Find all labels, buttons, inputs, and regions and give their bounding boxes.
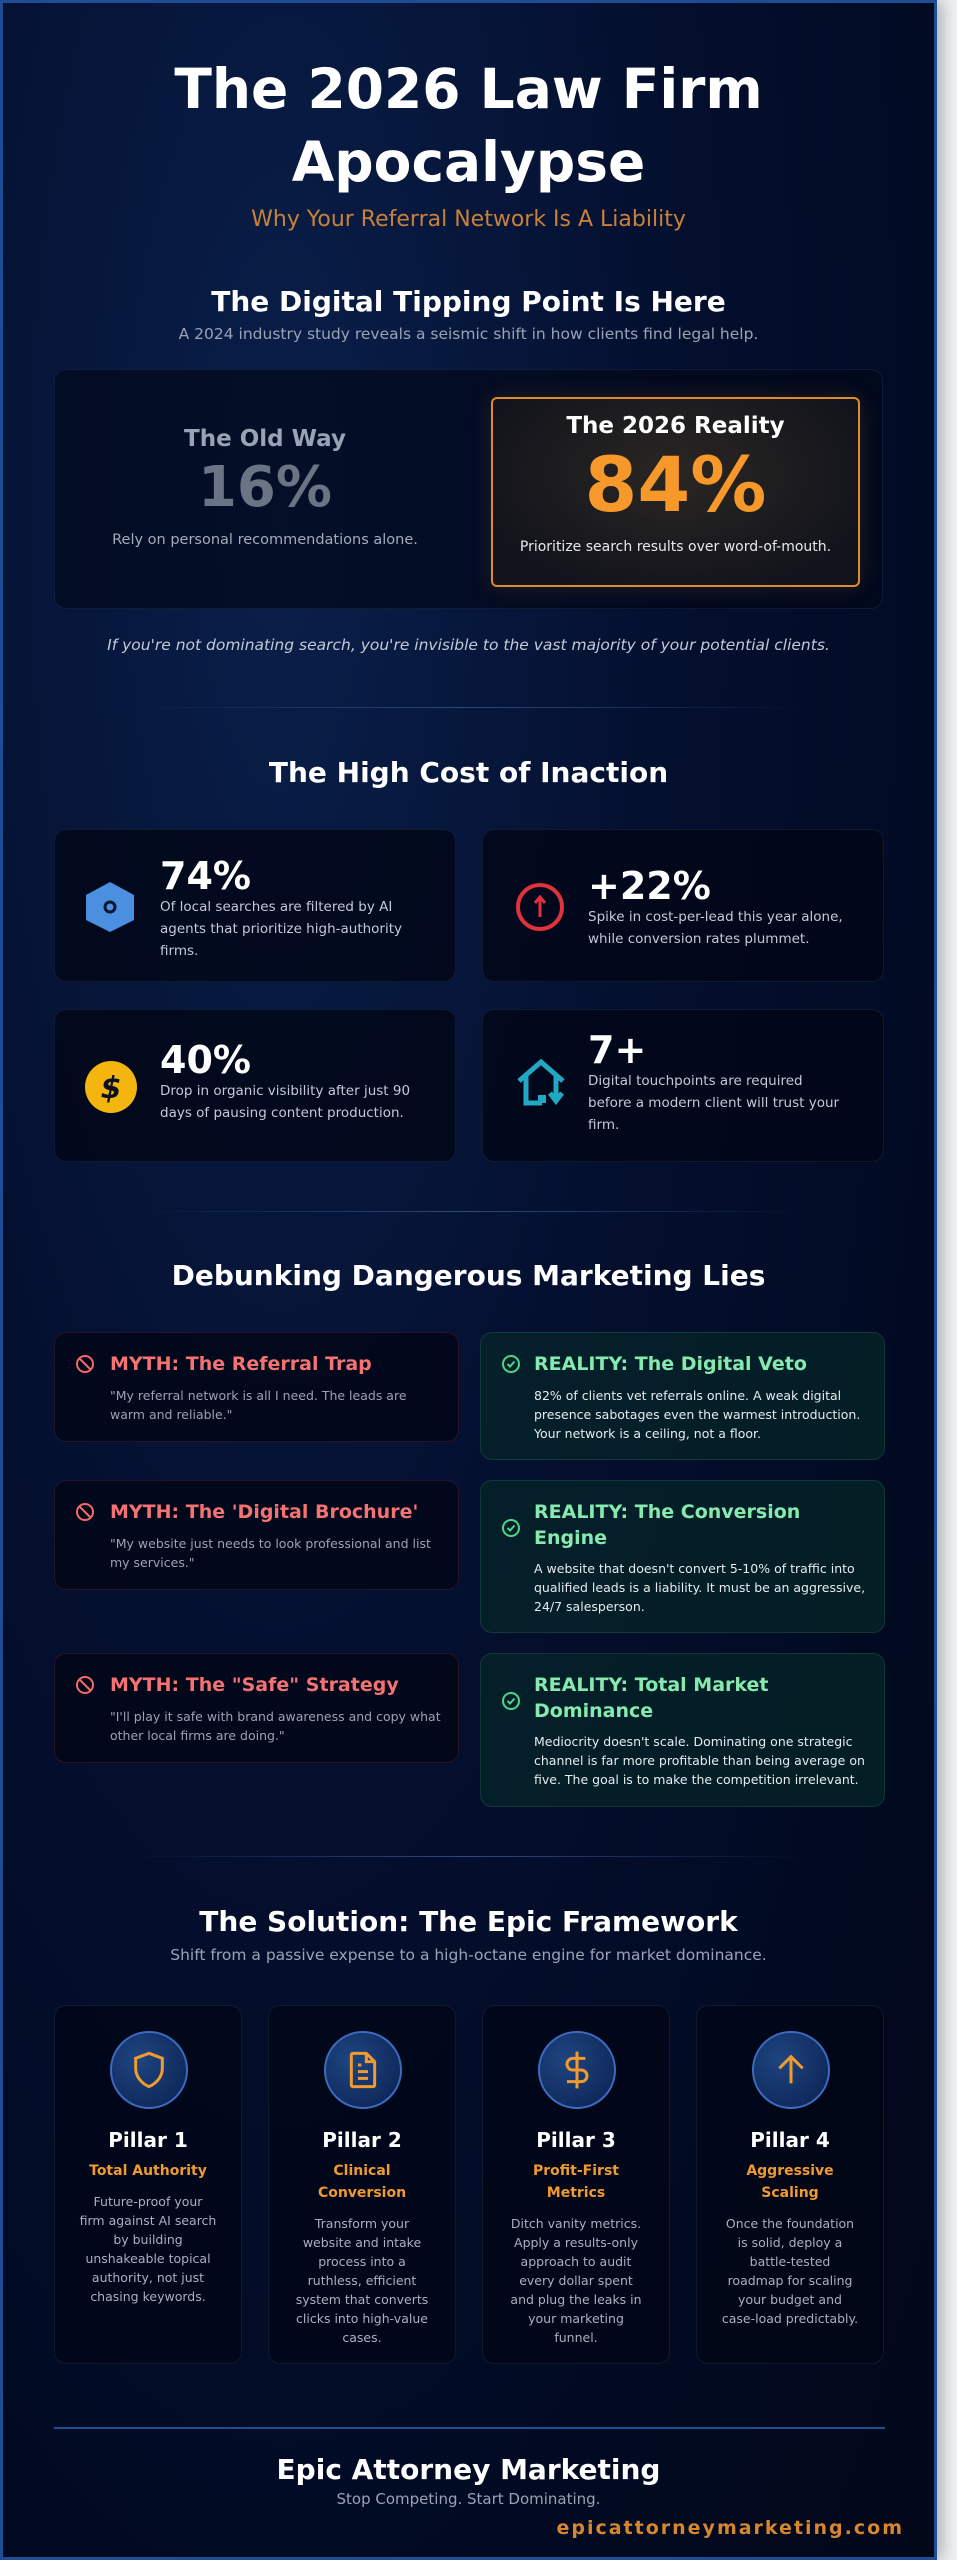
stat card 7+: 7+ [588, 1028, 646, 1072]
stat card +22% [482, 829, 884, 982]
icon: dollar [538, 2031, 616, 2109]
myth 1: "My referral network is all I need. The leads are warm and reliable." [110, 1388, 407, 1422]
icon: house arrow [517, 1059, 565, 1106]
pillar 2: Clinical Conversion [318, 2163, 406, 2201]
pillar 2: Pillar 2 [322, 2128, 402, 2152]
icon: check [502, 1692, 520, 1710]
stat card 40% [54, 1009, 456, 1162]
myth 3 [54, 1653, 459, 1763]
stat card 74% [54, 829, 456, 982]
heading: cost of inaction: The High Cost of Inaction [269, 756, 668, 789]
reality 3 [480, 1653, 885, 1807]
icon: check [502, 1355, 520, 1373]
myth 3: "I'll play it safe with brand awareness and copy what other local firms are doing." [110, 1709, 441, 1743]
stat card 7+ [482, 1009, 884, 1162]
myth 2: MYTH: The 'Digital Brochure' [110, 1501, 418, 1523]
old way [112, 426, 418, 548]
pillar 3: Pillar 3 [536, 2128, 616, 2152]
panel: comparison [54, 369, 883, 609]
footer brand: Epic Attorney Marketing [277, 2453, 660, 2486]
footer tagline: Stop Competing. Start Dominating. [337, 2490, 600, 2508]
icon: check [502, 1519, 520, 1537]
icon: ban [76, 1503, 94, 1521]
2026 reality card: 84% [585, 440, 766, 529]
icon: yellow coin: $ [101, 1071, 121, 1106]
text: study: A 2024 industry study reveals a seismic shift in how clients find legal help. [179, 325, 758, 343]
reality 1: 82% of clients vet referrals online. A weak digital presence sabotages even the warmest introduction. Your network is a ceiling, not a floor. [534, 1388, 860, 1441]
icon: arrow up [752, 2031, 830, 2109]
icon: ban [76, 1355, 94, 1373]
reality 2 [480, 1480, 885, 1633]
reality 1 [480, 1332, 885, 1460]
icon: yellow coin [85, 1061, 137, 1113]
pillar 3: Profit-First Metrics [533, 2163, 619, 2201]
icon: shield [110, 2031, 188, 2109]
pillar 2: Transform your website and intake process into a ruthless, efficient system that converts clicks into high-value cases. [296, 2216, 428, 2345]
old way: 16% [198, 455, 332, 520]
reality 3: REALITY: Total Market Dominance [534, 1674, 768, 1722]
myth 3: MYTH: The "Safe" Strategy [110, 1674, 399, 1696]
icon: red gauge [516, 883, 564, 931]
icon: ban [76, 1676, 94, 1694]
stat card 74%: Of local searches are filtered by AI agents that prioritize high-authority firms. [160, 899, 402, 959]
pillar 1: Pillar 1 [108, 2128, 188, 2152]
heading: solution: The Solution: The Epic Framework [199, 1905, 738, 1938]
pillar 4 [696, 2005, 884, 2364]
2026 reality card: Prioritize search results over word-of-mouth. [520, 539, 831, 555]
icon: document [324, 2031, 402, 2109]
myth 2 [54, 1480, 459, 1590]
footer url: epicattorneymarketing.com [556, 2517, 904, 2539]
pillar 1 [54, 2005, 242, 2364]
title: The 2026 Law Firm [174, 57, 763, 121]
myth 1: MYTH: The Referral Trap [110, 1353, 372, 1375]
text: italic callout: If you're not dominating search, you're invisible to the vast majority of your potential clients. [107, 636, 830, 654]
heading: tipping point: The Digital Tipping Point Is Here [211, 285, 726, 318]
reality 1: REALITY: The Digital Veto [534, 1353, 807, 1375]
reality 2: A website that doesn't convert 5-10% of traffic into qualified leads is a liability. It must be an aggressive, 24/7 salesperson. [534, 1561, 865, 1614]
pillar 1: Future-proof your [94, 2194, 202, 2209]
stat card +22%: +22% [588, 864, 711, 908]
subtitle: Why Your Referral Network Is A Liability [251, 207, 686, 232]
2026 reality card: The 2026 Reality [566, 413, 785, 439]
pillar 1: Total Authority [89, 2163, 207, 2179]
stat card 40%: Drop in organic visibility after just 90 days of pausing content production. [160, 1083, 410, 1121]
pillar 1: firm against AI search by building unshakeable topical authority, not just chasing keywords. [80, 2213, 216, 2304]
stat card 40%: 40% [160, 1038, 251, 1082]
old way: The Old Way [184, 426, 346, 452]
pillar 2 [268, 2005, 456, 2364]
pillar 4: Once the foundation is solid, deploy a battle-tested roadmap for scaling your budget and case-load predictably. [722, 2216, 858, 2326]
reality 2: REALITY: The Conversion Engine [534, 1501, 800, 1549]
pillar 4: Pillar 4 [750, 2128, 830, 2152]
icon: hexagon [86, 882, 134, 932]
old way: Rely on personal recommendations alone. [112, 532, 418, 548]
stat card 7+: Digital touchpoints are required before a modern client will trust your firm. [588, 1073, 839, 1133]
pillar 3 [482, 2005, 670, 2364]
stat card +22%: Spike in cost-per-lead this year alone, while conversion rates plummet. [588, 909, 843, 947]
pillar 3: Ditch vanity metrics. Apply a results-only approach to audit every dollar spent and plug the leaks in your marketing funnel. [510, 2216, 642, 2345]
title: Apocalypse [292, 130, 645, 194]
heading: debunking: Debunking Dangerous Marketing Lies [172, 1259, 765, 1292]
stat card 74%: 74% [160, 854, 251, 898]
pillar 4: Aggressive Scaling [746, 2163, 834, 2201]
reality 3: Mediocrity doesn't scale. Dominating one strategic channel is far more profitable than being average on five. The goal is to make the competition irrelevant. [534, 1734, 865, 1787]
2026 reality card [491, 397, 860, 587]
text: solution sub: Shift from a passive expense to a high-octane engine for market dominance. [170, 1946, 767, 1964]
myth 1 [54, 1332, 459, 1442]
title [174, 57, 763, 194]
myth 2: "My website just needs to look professional and list my services." [110, 1536, 431, 1570]
